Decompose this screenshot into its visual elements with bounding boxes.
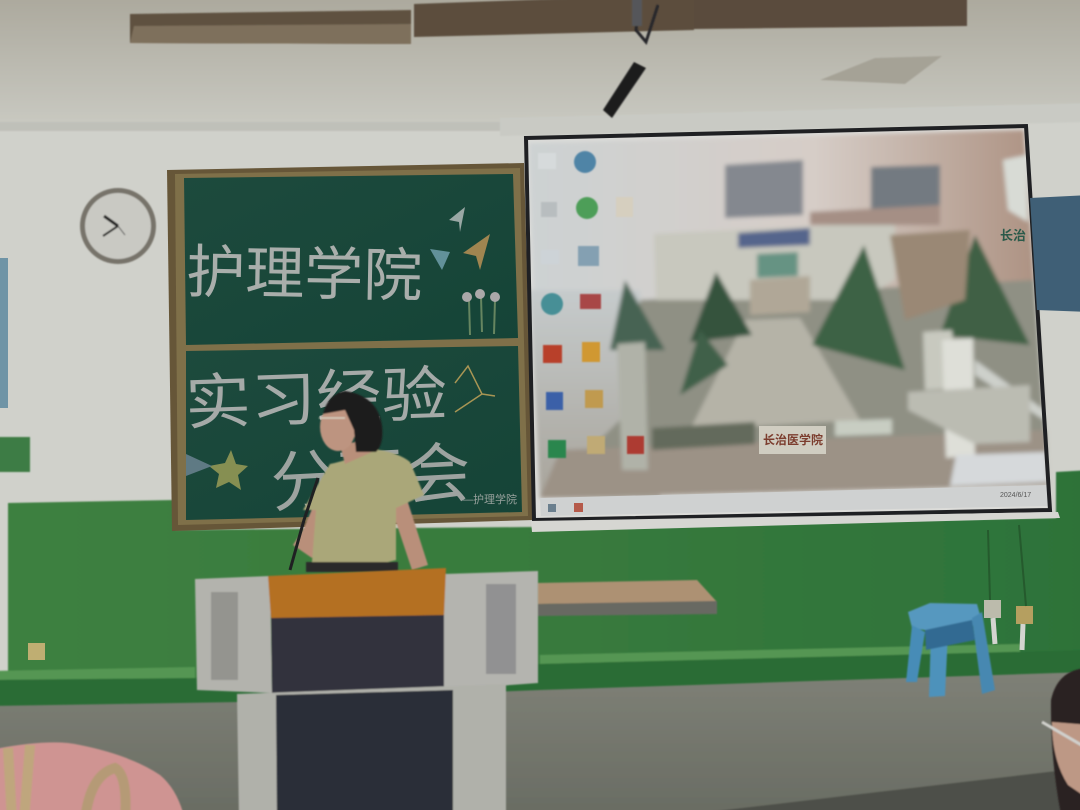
chalk flowers <box>462 289 500 335</box>
pink bag foreground <box>0 742 185 810</box>
wall sockets and cables <box>28 525 1033 660</box>
chalk signature: —护理学院 <box>462 492 517 506</box>
speaker <box>293 391 428 572</box>
chalk constellation <box>455 366 495 412</box>
arms <box>392 490 428 570</box>
wooden top <box>268 568 446 619</box>
wallpaper gate towers <box>923 330 956 390</box>
desktop wallpaper <box>529 130 1048 498</box>
desktop icons <box>538 151 644 458</box>
wall clock <box>80 188 156 264</box>
blue plastic stool <box>906 603 995 697</box>
desktop taskbar: 2024/6/17 <box>1000 492 1031 499</box>
chalk heading: nursing college: 护理学院 <box>186 240 423 309</box>
olive shirt <box>303 449 424 567</box>
pedestal <box>237 684 506 810</box>
right grey panel <box>444 571 538 690</box>
fold-out desk shelf <box>537 580 717 616</box>
wallpaper trees <box>690 272 752 342</box>
face <box>320 403 356 451</box>
dark hair <box>323 391 382 452</box>
wallpaper college sign: 长治医学院 <box>763 432 823 447</box>
desktop popup <box>950 452 1047 486</box>
chalk star and comet <box>186 450 248 490</box>
speaker grills <box>211 592 238 680</box>
screen frame <box>526 126 1050 520</box>
wallpaper building <box>654 222 895 300</box>
wallpaper emblem caption: 长治 <box>1000 228 1026 243</box>
foreground audience head <box>1042 668 1080 810</box>
blue wall poster <box>1030 195 1080 312</box>
chalk heading: sharing session: 分享会 <box>269 436 472 520</box>
chalk heading: internship experience: 实习经验 <box>184 361 448 437</box>
left grey panel <box>195 576 272 693</box>
hanging microphone <box>603 0 658 118</box>
glasses <box>319 417 345 419</box>
ceiling <box>0 0 1080 136</box>
neck <box>340 440 372 464</box>
desktop taskbar <box>540 485 1050 516</box>
floor stage <box>0 672 1080 810</box>
blackboard <box>167 163 534 531</box>
wallpaper school emblem <box>1003 155 1028 222</box>
lectern <box>195 568 538 810</box>
handheld microphone <box>290 478 318 570</box>
green wall band <box>0 437 1080 716</box>
side poster strip <box>0 258 8 408</box>
chalk paper planes <box>430 207 490 270</box>
wallpaper college sign <box>759 426 826 454</box>
projector screen <box>524 124 1060 532</box>
navy front <box>271 615 444 694</box>
ceiling lights <box>130 0 967 44</box>
